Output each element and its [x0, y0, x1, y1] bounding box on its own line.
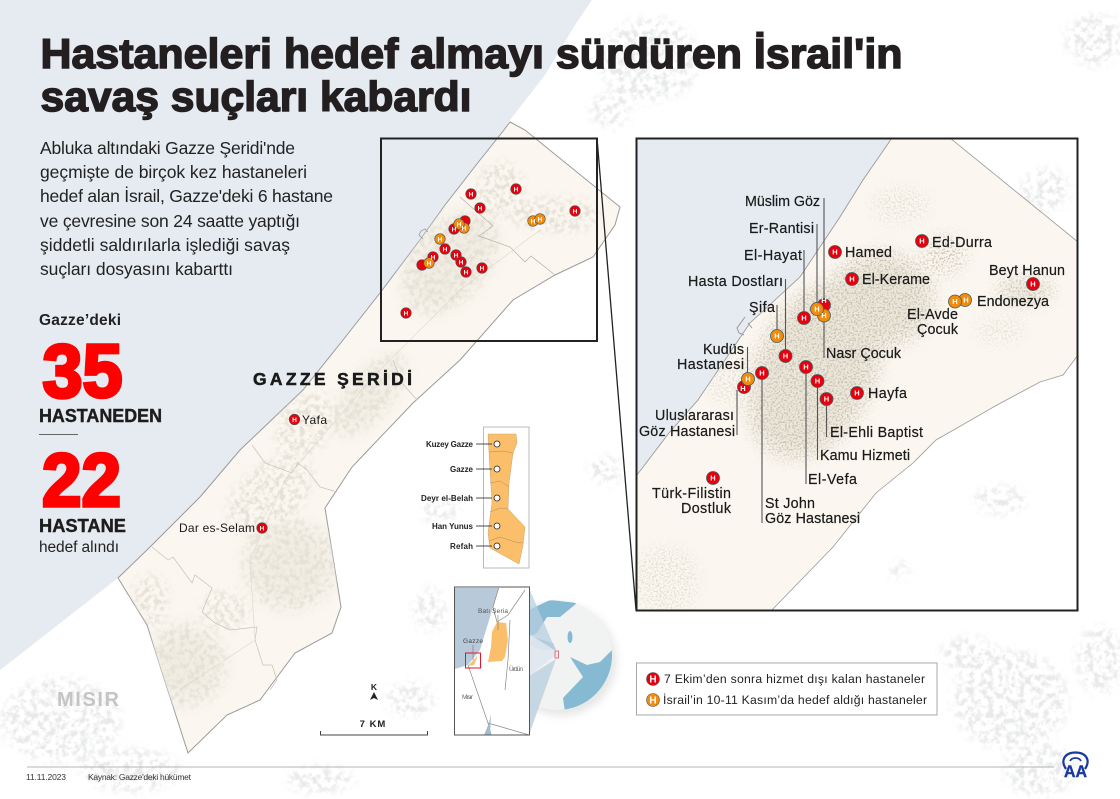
hospital marker letters: H	[815, 377, 820, 386]
hospital labels on detail map: Ed-Durra	[932, 235, 992, 251]
hospital marker letters: H	[783, 352, 788, 361]
region locator map: Batı Şeria	[478, 608, 508, 615]
hospital labels on detail map: Endonezya	[977, 294, 1049, 310]
intro text	[40, 138, 333, 279]
hospital labels on detail map: El-Ehli Baptist	[830, 425, 923, 441]
hospital labels on detail map: Beyt Hanun	[989, 263, 1065, 279]
statistics: hospitals: hedef alındı	[39, 539, 119, 556]
governorates mini map: Han Yunus	[432, 522, 474, 531]
locator frame with hospital markers: H	[573, 208, 578, 215]
hospital labels on detail map: Er-Rantisi	[749, 221, 814, 237]
legend: H	[649, 674, 657, 686]
statistics: hospitals: 35	[42, 329, 122, 413]
locator frame with hospital markers: H	[438, 236, 443, 243]
hospital labels on detail map: Kamu Hizmeti	[820, 448, 910, 464]
footer: 11.11.2023	[26, 772, 66, 782]
hospital marker letters: H	[952, 297, 958, 306]
locator frame with hospital markers: H	[464, 269, 469, 276]
scale bar	[320, 719, 428, 735]
detail map panel	[630, 138, 1078, 615]
statistics: hospitals	[39, 312, 162, 556]
hospital markers on detail map	[706, 234, 1040, 484]
locator frame with hospital markers: H	[427, 260, 432, 267]
locator frame with hospital markers: H	[454, 252, 459, 259]
intro text: geçmişte de birçok kez hastaneleri	[40, 162, 307, 182]
hospital marker letters: H	[854, 389, 860, 398]
hospital labels on detail map: El-Vefa	[808, 472, 857, 488]
hospital labels on detail map: Müslim Göz	[745, 194, 820, 210]
statistics: hospitals: Gazze’deki	[39, 312, 121, 329]
north arrow: K	[371, 682, 378, 692]
title	[40, 30, 903, 120]
hospital marker letters: H	[740, 384, 746, 393]
hospital marker letters: H	[821, 296, 827, 305]
title: Hastaneleri hedef almayı sürdüren İsrail'in	[40, 30, 903, 77]
governorates mini map	[421, 427, 529, 568]
hospital: Dar es-Selam: Dar es-Selam	[179, 521, 255, 535]
locator frame with hospital markers: H	[462, 225, 467, 232]
intro text: şiddetli saldırılarla işlediği savaş	[40, 235, 290, 255]
intro text: ve çevresine son 24 saatte yaptığı	[40, 211, 300, 231]
hospital labels on detail map: Göz Hastanesi	[765, 511, 860, 527]
governorates mini map: Kuzey Gazze	[426, 440, 474, 449]
hospital labels on detail map: Şifa	[749, 300, 775, 316]
hospital marker letters: H	[849, 275, 855, 284]
logo: AA	[1063, 752, 1088, 781]
legend	[636, 663, 937, 715]
north arrow	[370, 682, 378, 700]
main map: Gaza Strip	[118, 122, 620, 753]
scale bar: 7 KM	[360, 719, 386, 730]
governorates mini map: Refah	[450, 542, 473, 551]
region locator map: Ürdün	[509, 665, 523, 673]
hospital marker letters: H	[824, 395, 829, 404]
legend: H	[649, 696, 657, 706]
locator frame with hospital markers	[381, 138, 597, 341]
legend: İsrail’in 10-11 Kasım’da hedef aldığı hastaneler	[663, 693, 927, 707]
locator frame with hospital markers: H	[538, 216, 543, 223]
hospital labels on detail map: St John	[765, 496, 815, 512]
hospital labels on detail map: Göz Hastanesi	[639, 424, 735, 440]
locator frame with hospital markers: H	[478, 205, 483, 212]
region locator map: Mısır	[462, 694, 474, 701]
region locator map: Gazze	[463, 638, 483, 645]
governorates mini map: Deyr el-Belah	[421, 494, 473, 503]
hospital marker letters: H	[774, 332, 780, 341]
leader lines	[737, 198, 826, 523]
hospital marker letters: H	[814, 305, 820, 314]
map label: Mısır: MISIR	[57, 689, 120, 711]
title: savaş suçları kabardı	[40, 73, 472, 120]
connector line	[597, 138, 636, 610]
hospital marker letters	[710, 237, 1036, 483]
hospital marker letters: H	[759, 369, 765, 378]
locator frame with hospital markers: H	[457, 221, 462, 228]
hospital marker letters: H	[832, 248, 838, 257]
locator frame with hospital markers: H	[404, 310, 409, 317]
map label: Gazze Şeridi: GAZZE ŞERİDİ	[253, 369, 412, 389]
hospital marker letters: H	[919, 237, 925, 246]
locator frame with hospital markers: H	[480, 265, 485, 272]
hospital marker letters: H	[745, 375, 751, 384]
locator frame with hospital markers: H	[459, 259, 464, 266]
hospital marker letters: H	[801, 314, 807, 323]
hospital labels on detail map: Türk-Filistin	[652, 486, 731, 502]
hospital labels on detail map: Dostluk	[681, 501, 732, 517]
hospital marker letters: H	[1030, 280, 1036, 289]
statistics: hospitals: HASTANE	[39, 516, 126, 536]
hospital: Yafa: H	[292, 417, 297, 424]
hospital labels on detail map: Hayfa	[868, 386, 907, 402]
hospital labels on detail map: El-Kerame	[862, 272, 930, 288]
locator frame with hospital markers: H	[469, 191, 474, 198]
hospital labels on detail map: Hasta Dostları	[688, 274, 783, 290]
sea	[0, 0, 592, 670]
intro text: suçları dosyasını kabarttı	[40, 259, 233, 279]
hospital: Yafa: Yafa	[302, 413, 327, 427]
legend: 7 Ekim’den sonra hizmet dışı kalan hastaneler	[664, 672, 925, 686]
locator frame with hospital markers: H	[431, 254, 436, 261]
statistics: hospitals: HASTANEDEN	[39, 406, 162, 426]
globe	[530, 590, 618, 732]
hospital marker letters: H	[821, 311, 827, 320]
locator frame with hospital markers: H	[452, 226, 457, 233]
footer	[26, 767, 1054, 782]
hospital labels on detail map: El-Avde	[907, 307, 958, 323]
logo: AA: AA	[1064, 762, 1087, 781]
locator frame with hospital markers: H	[514, 186, 519, 193]
hospital labels on detail map: Nasr Çocuk	[826, 346, 902, 362]
hospital labels on detail map: Hastanesi	[677, 357, 744, 373]
governorates mini map: Gazze	[450, 465, 474, 474]
footer: Kaynak: Gazze'deki hükümet	[88, 772, 192, 782]
hospital: Dar es-Selam: H	[260, 525, 265, 532]
intro text: hedef alan İsrail, Gazze'deki 6 hastane	[40, 186, 333, 206]
region locator map	[454, 587, 530, 735]
locator frame with hospital markers: H	[531, 218, 536, 225]
locator frame with hospital markers: H	[443, 246, 448, 253]
hospital marker letters: H	[710, 474, 716, 483]
hospital labels on detail map	[639, 194, 1065, 527]
hospital: Yafa	[289, 413, 327, 427]
hospital labels on detail map: El-Hayat	[744, 248, 802, 264]
hospital labels on detail map: Kudüs	[703, 342, 744, 358]
hospital labels on detail map: Uluslararası	[655, 408, 734, 424]
hospital marker letters: H	[963, 296, 969, 305]
hospital marker letters: H	[803, 363, 809, 372]
intro text: Abluka altındaki Gazze Şeridi'nde	[40, 138, 295, 158]
hospital labels on detail map: Çocuk	[917, 322, 959, 338]
hospital labels on detail map: Hamed	[845, 245, 892, 261]
statistics: hospitals: 22	[42, 438, 121, 522]
